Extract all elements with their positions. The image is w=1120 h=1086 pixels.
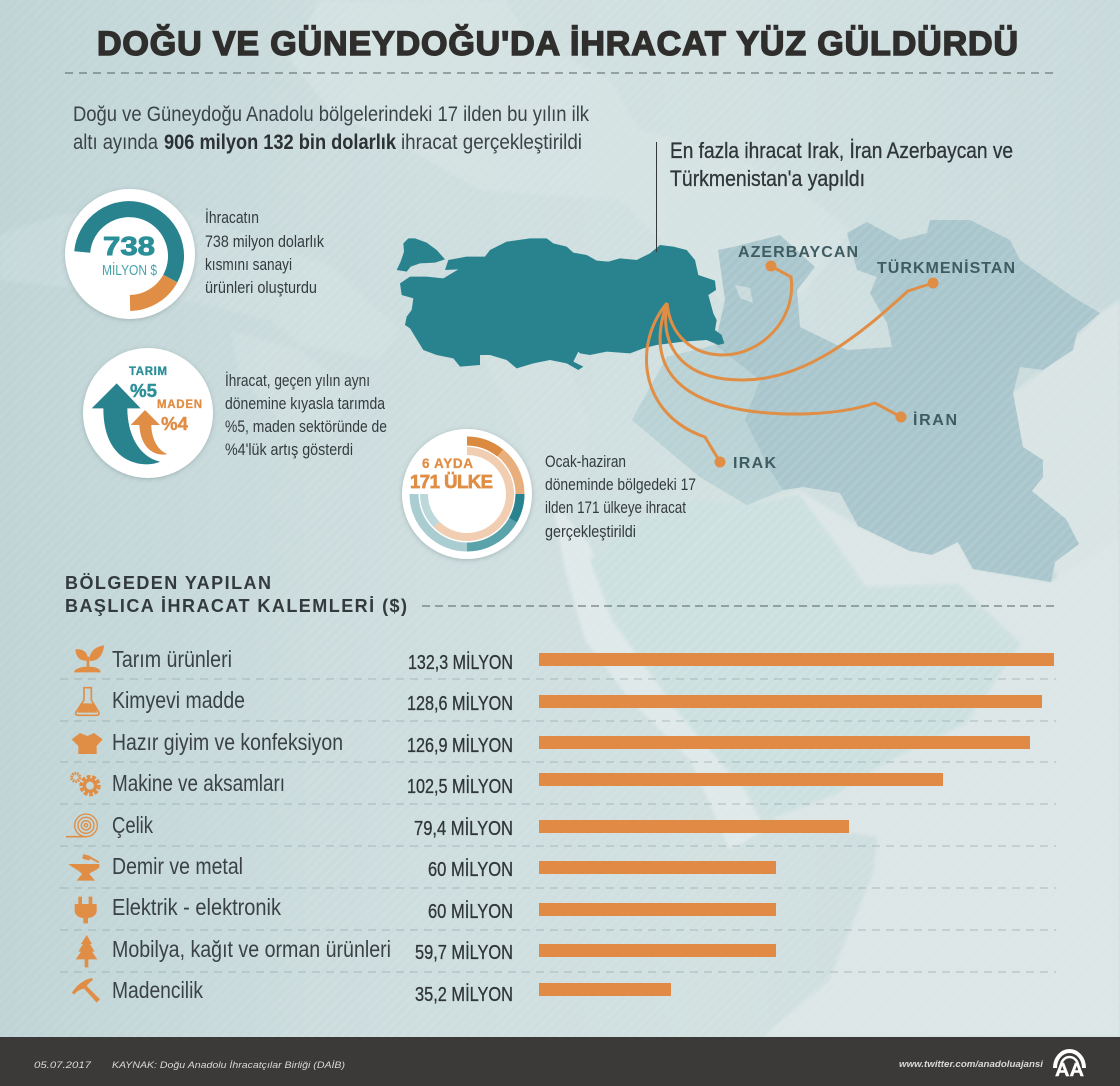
country labels (733, 244, 1015, 472)
icon: tree (76, 935, 97, 967)
footer (0, 1037, 1120, 1086)
text: 171 countries: gerçekleştirildi (545, 523, 636, 541)
icons (66, 645, 104, 1003)
map callout (656, 138, 1013, 252)
text: growth: %5, maden sektöründe de (225, 418, 387, 436)
row labels: Çelik (112, 812, 153, 838)
icon: gears (72, 773, 99, 794)
icon: mining pick (72, 978, 100, 1003)
row labels: Elektrik - elektronik (112, 894, 281, 920)
section heading: BAŞLICA İHRACAT KALEMLERİ ($) (65, 596, 407, 616)
country labels: TÜRKMENİSTAN (877, 258, 1015, 277)
map: Iraq, Iran, Azerbaijan and Turkmenistan region (632, 220, 1100, 582)
country labels: IRAK (733, 455, 776, 472)
east land (1013, 300, 1120, 585)
text: industry share: ürünleri oluşturdu (205, 279, 317, 297)
section heading (65, 573, 407, 616)
icon: electric plug (75, 897, 97, 923)
row labels: Hazır giyim ve konfeksiyon (112, 729, 343, 755)
icon: t-shirt (72, 733, 103, 754)
row values: 35,2 MİLYON (415, 983, 513, 1006)
title: DOĞU VE GÜNEYDOĞU'DA İHRACAT YÜZ GÜLDÜRDÜ (97, 25, 1018, 63)
text: growth (225, 371, 387, 459)
footer: KAYNAK: Doğu Anadolu İhracatçılar Birliği (DAİB) (112, 1060, 345, 1071)
text: 171 countries: Ocak-haziran (545, 453, 626, 471)
row labels: Mobilya, kağıt ve orman ürünleri (112, 936, 391, 962)
text: 171 countries: döneminde bölgedeki 17 (545, 476, 696, 494)
bar chart (539, 653, 1054, 996)
row labels: Demir ve metal (112, 853, 243, 879)
red sea (552, 500, 765, 850)
text: growth: dönemine kıyasla tarımda (225, 395, 386, 413)
intro text: ihracat gerçekleştirildi (401, 131, 582, 154)
ocean and gulf (747, 490, 1120, 1037)
icon: agriculture sprout (74, 645, 104, 672)
map: Turkey (397, 238, 724, 370)
logo: AA (1055, 1051, 1084, 1080)
intro text: Doğu ve Güneydoğu Anadolu bölgelerindeki 17 ilden bu yılın ilk (73, 103, 589, 126)
row values: 128,6 MİLYON (407, 692, 513, 715)
intro text: 906 milyon 132 bin dolarlık (164, 131, 396, 154)
panel: agriculture and mining arrows (83, 348, 213, 478)
logo: AA: AA (1055, 1060, 1084, 1080)
text: growth: İhracat, geçen yılın aynı (225, 371, 370, 390)
row values: 60 MİLYON (428, 900, 513, 923)
country labels: İRAN (913, 411, 957, 429)
panel: agriculture and mining arrows: TARIM (129, 366, 167, 378)
row labels: Makine ve aksamları (112, 770, 285, 796)
arabia (590, 494, 1021, 819)
panel: 171 countries ring (402, 429, 532, 559)
icon: chemical flask (76, 688, 99, 715)
row values: 79,4 MİLYON (414, 817, 513, 840)
row values: 132,3 MİLYON (408, 651, 513, 674)
row values: 59,7 MİLYON (415, 941, 513, 964)
row labels: Kimyevi madde (112, 687, 245, 713)
row labels (112, 646, 391, 1003)
panel: 738 million donut: MİLYON $ (102, 261, 158, 279)
footer: www.twitter.com/anadoluajansi (899, 1059, 1043, 1070)
text: 171 countries (545, 453, 696, 541)
text: industry share (205, 208, 325, 297)
section heading: BÖLGEDEN YAPILAN (65, 573, 271, 593)
row labels: Tarım ürünleri (112, 646, 232, 672)
footer: 05.07.2017 (34, 1060, 92, 1071)
icon: steel coil (66, 814, 97, 837)
panel: 738 million donut (65, 189, 195, 319)
intro text (73, 103, 589, 154)
text: industry share: 738 milyon dolarlık (205, 233, 325, 251)
row values: 102,5 MİLYON (407, 775, 513, 798)
country labels: AZERBAYCAN (738, 244, 858, 261)
intro text: altı ayında (73, 131, 158, 154)
map callout: Türkmenistan'a yapıldı (670, 166, 865, 191)
map callout: En fazla ihracat Irak, İran Azerbaycan ve (670, 138, 1013, 163)
panel: agriculture and mining arrows: %4 (161, 414, 188, 434)
text: industry share: kısmını sanayi (205, 256, 292, 274)
icon: anvil and hammer (68, 854, 99, 881)
row values: 126,9 MİLYON (407, 734, 513, 757)
panel: 738 million donut: 738 (103, 231, 155, 261)
text: growth: %4'lük artış gösterdi (225, 441, 353, 459)
panel: agriculture and mining arrows: %5 (130, 381, 157, 401)
panel: 171 countries ring: 6 AYDA (422, 456, 473, 471)
text: 171 countries: ilden 171 ülkeye ihracat (545, 499, 686, 517)
panel: agriculture and mining arrows: MADEN (157, 399, 202, 411)
row values: 60 MİLYON (428, 858, 513, 881)
row labels: Madencilik (112, 977, 203, 1003)
text: industry share: İhracatın (205, 208, 259, 227)
panel: 171 countries ring: 171 ÜLKE (410, 471, 493, 492)
row values (407, 651, 513, 1006)
export routes (646, 260, 938, 468)
